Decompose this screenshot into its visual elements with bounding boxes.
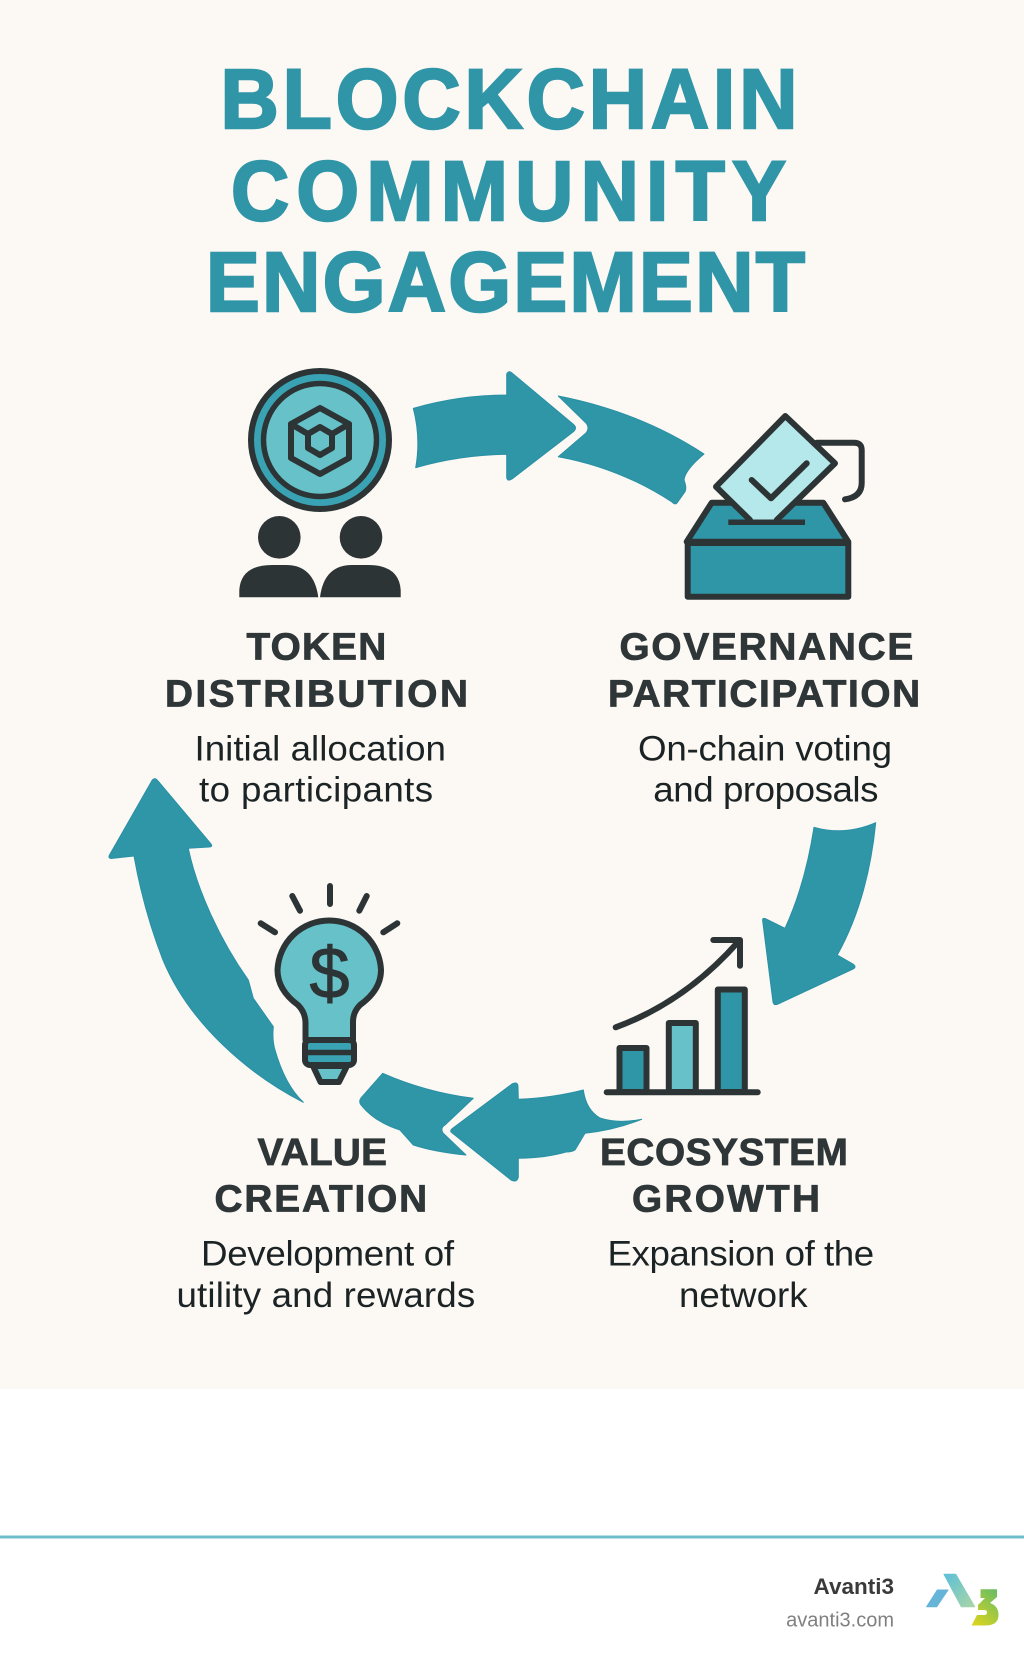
text block: governance participation (608, 626, 920, 810)
icon: Avanti3 logo (927, 1574, 998, 1626)
arrow: token to governance (413, 372, 704, 504)
icon: light bulb with dollar sign (261, 886, 397, 1082)
text block: ecosystem growth: ECOSYSTEM (600, 1131, 848, 1174)
text block: ecosystem growth (600, 1131, 874, 1315)
title: COMMUNITY (231, 145, 786, 238)
arrow: value to token (109, 779, 303, 1102)
text block: token distribution: to participants (199, 770, 433, 810)
footer brand text (786, 1574, 894, 1632)
text block: governance participation: PARTICIPATION (608, 673, 920, 715)
text block: value creation: CREATION (214, 1178, 427, 1221)
icon: ballot box (687, 416, 862, 597)
footer brand text: avanti3.com (786, 1610, 894, 1632)
arrow: ecosystem to value (360, 1073, 642, 1181)
icon: bar chart with growth arrow (607, 940, 758, 1092)
text block: value creation (176, 1131, 475, 1315)
footer divider (0, 1536, 1024, 1538)
title (206, 53, 805, 330)
icon: light bulb with dollar sign: $ (309, 934, 350, 1014)
title: BLOCKCHAIN (220, 53, 797, 147)
title: ENGAGEMENT (206, 236, 805, 330)
text block: governance participation: On-chain voting (638, 729, 892, 768)
text block: ecosystem growth: network (679, 1276, 808, 1315)
text block: token distribution: DISTRIBUTION (165, 673, 468, 715)
text block: governance participation: GOVERNANCE (620, 626, 913, 669)
text block: governance participation: and proposals (653, 770, 879, 810)
footer brand text: Avanti3 (814, 1574, 894, 1599)
text block: value creation: utility and rewards (176, 1276, 475, 1315)
text block: token distribution: Initial allocation (194, 729, 446, 768)
icon: token coin and people (239, 371, 401, 597)
text block: token distribution: TOKEN (246, 626, 386, 669)
text block: ecosystem growth: GROWTH (632, 1178, 820, 1221)
text block: value creation: Development of (201, 1234, 455, 1273)
arrow: governance to ecosystem (763, 823, 876, 1005)
text block: value creation: VALUE (258, 1131, 387, 1174)
text block: token distribution (165, 626, 468, 810)
text block: ecosystem growth: Expansion of the (608, 1234, 874, 1273)
